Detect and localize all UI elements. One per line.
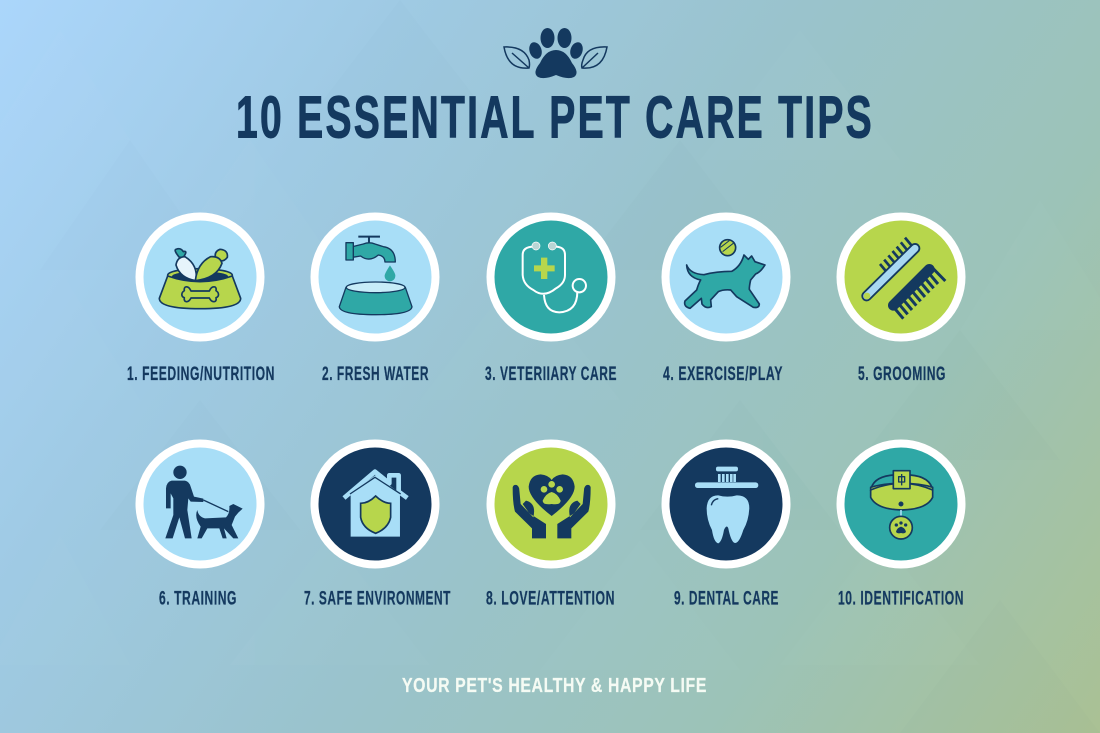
footer tagline: YOUR PET'S HEALTHY & HAPPY LIFE bbox=[402, 674, 707, 697]
badge bbox=[490, 216, 612, 338]
label: 5. GROOMING bbox=[858, 363, 946, 385]
tip 4: exercise/play bbox=[663, 216, 786, 385]
icon: toothbrush and tooth bbox=[695, 467, 758, 543]
icon: running dog and ball bbox=[685, 240, 765, 308]
label: 3. VETERIIARY CARE bbox=[485, 363, 617, 385]
badge bbox=[666, 444, 786, 564]
icon: faucet and bowl bbox=[339, 237, 412, 315]
badge bbox=[140, 216, 260, 338]
icon: food bowl bbox=[159, 249, 241, 309]
icon: person walking dog bbox=[165, 466, 243, 538]
tip 1: feeding bbox=[127, 216, 275, 385]
tip 8: love/attention bbox=[486, 444, 615, 610]
label: 7. SAFE ENVIRONMENT bbox=[304, 588, 451, 610]
tip 9: dental care bbox=[666, 444, 786, 610]
label: 4. EXERCISE/PLAY bbox=[663, 363, 783, 385]
tip 10: identification bbox=[838, 444, 964, 610]
icon: house with shield bbox=[344, 472, 407, 537]
tip 3: veterinary care bbox=[485, 216, 617, 385]
label: 9. DENTAL CARE bbox=[674, 588, 779, 610]
icon: collar with tag bbox=[871, 471, 933, 539]
label: 2. FRESH WATER bbox=[322, 363, 429, 385]
icon: paw with leaves logo bbox=[504, 28, 607, 78]
badge bbox=[840, 216, 962, 338]
label: 8. LOVE/ATTENTION bbox=[486, 588, 615, 610]
tip 7: safe environment bbox=[304, 444, 451, 610]
badge bbox=[666, 216, 786, 338]
label: 10. IDENTIFICATION bbox=[838, 588, 964, 610]
tip 6: training bbox=[140, 444, 260, 610]
badge bbox=[314, 216, 436, 338]
label: 1. FEEDING/NUTRITION bbox=[127, 363, 275, 385]
badge bbox=[140, 444, 260, 564]
tip 5: grooming bbox=[840, 216, 962, 385]
icon: brush and comb bbox=[864, 238, 945, 319]
icon: hands holding heart with paw bbox=[513, 474, 591, 538]
badge bbox=[314, 444, 436, 564]
label: 6. TRAINING bbox=[159, 588, 237, 610]
badge bbox=[840, 444, 962, 564]
icon: stethoscope with cross bbox=[523, 242, 586, 312]
badge bbox=[490, 444, 612, 564]
tip 2: fresh water bbox=[314, 216, 436, 385]
